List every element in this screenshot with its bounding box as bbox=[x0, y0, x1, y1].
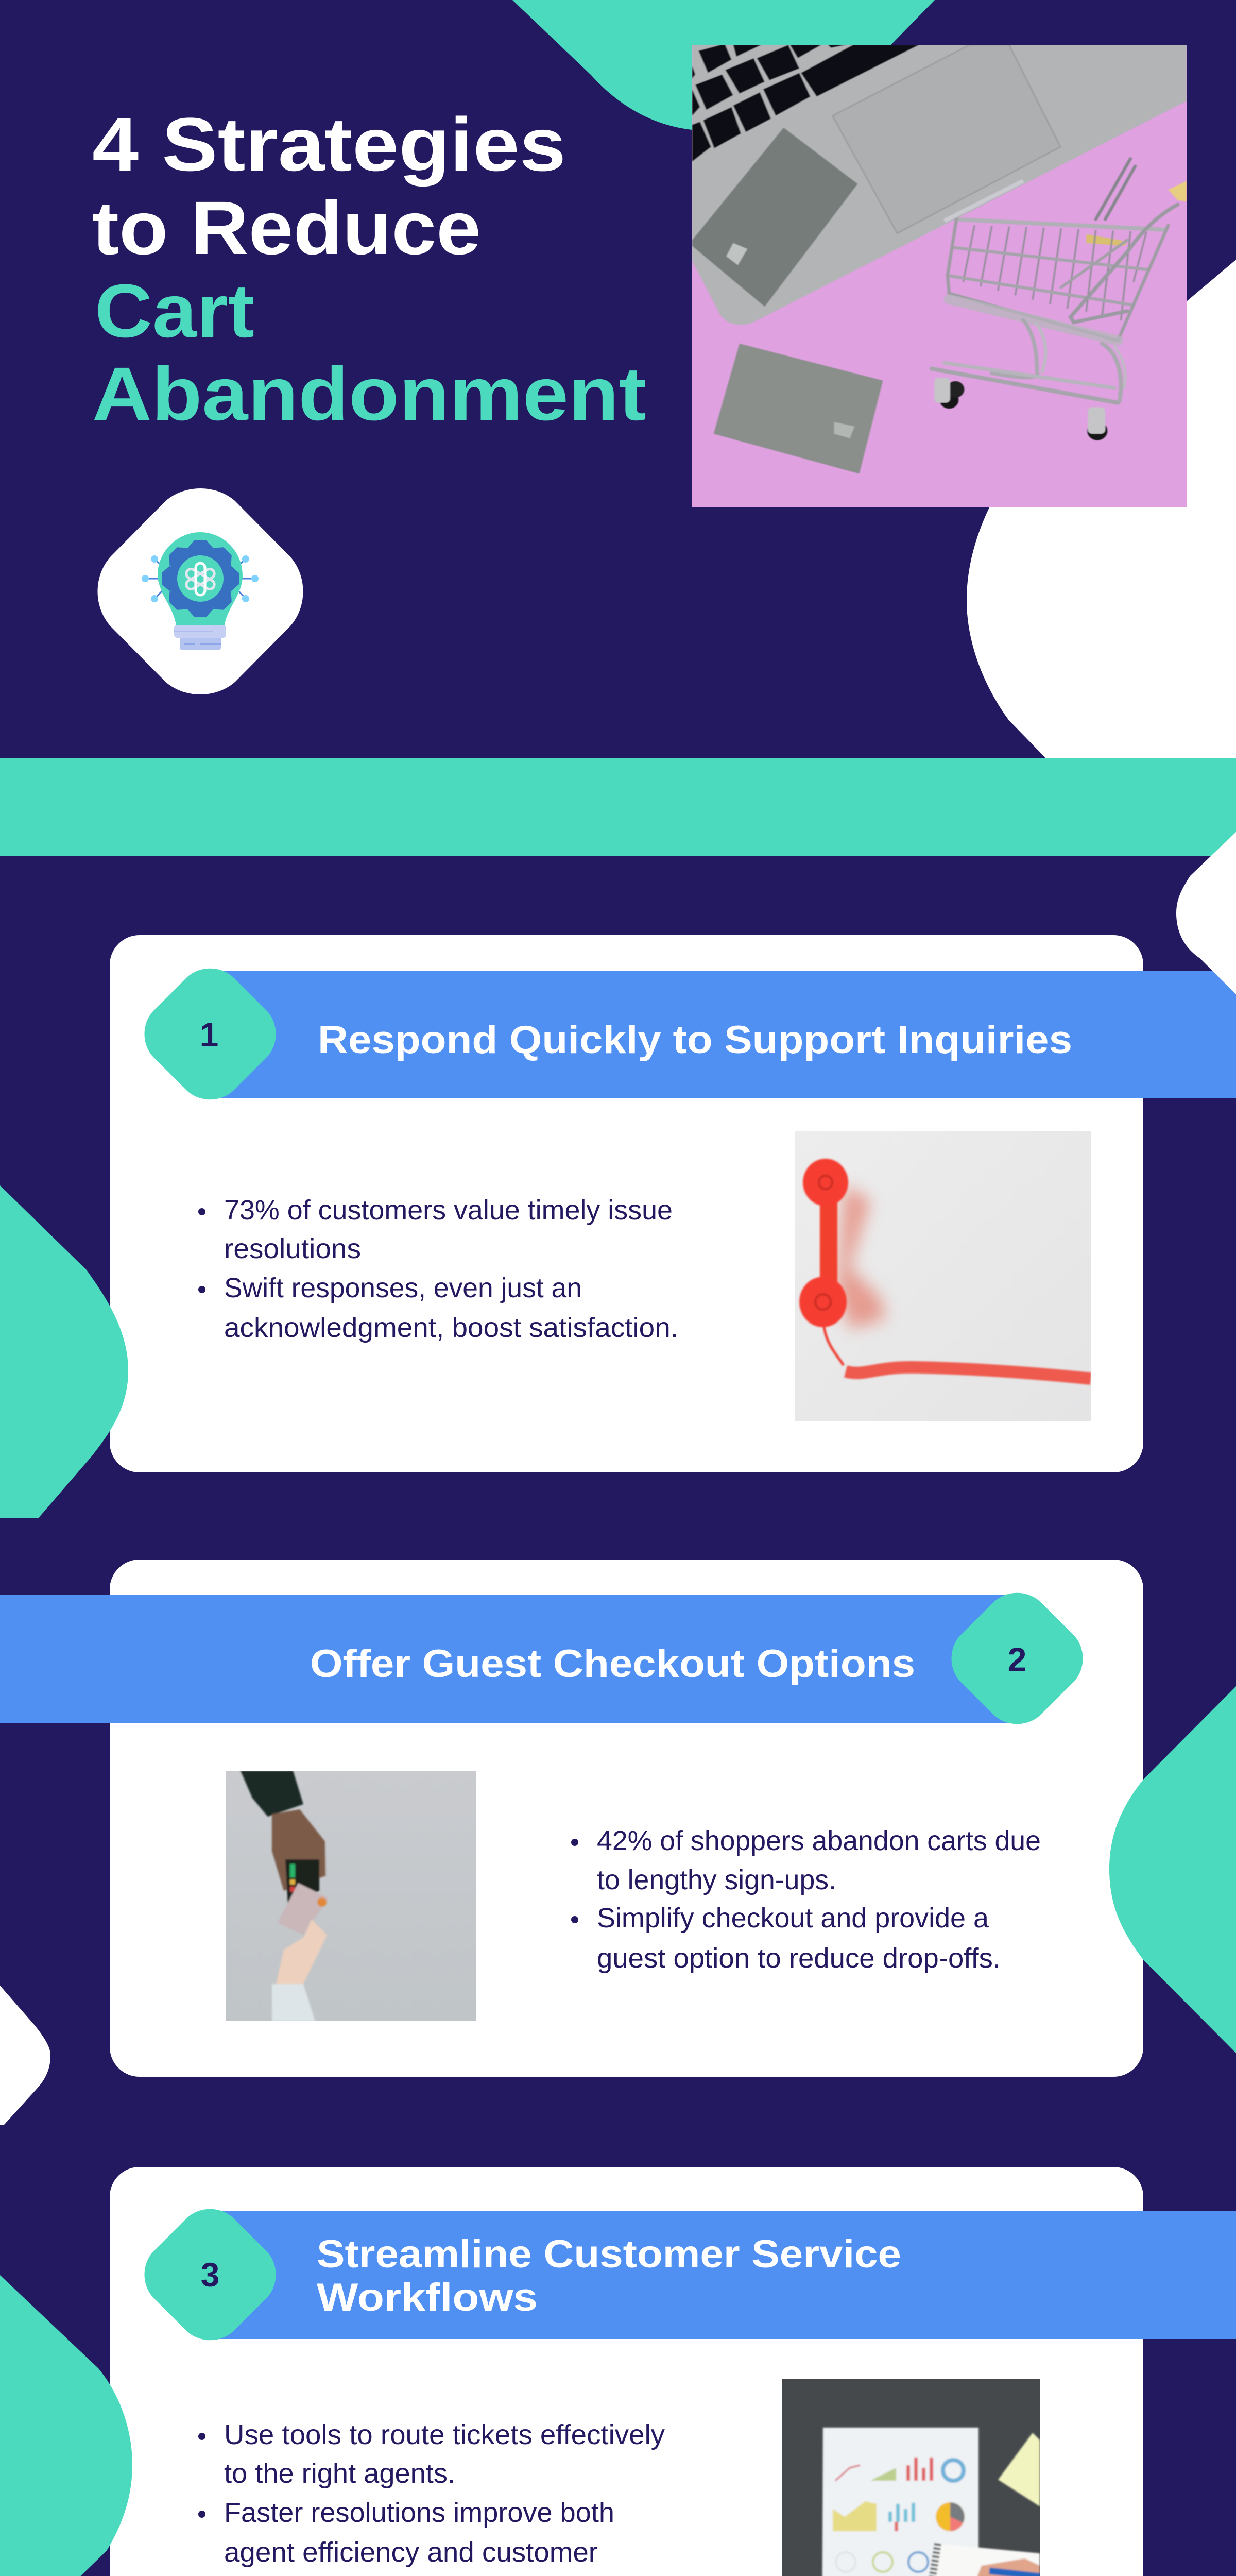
decorative shape: right white blob under band bbox=[1176, 832, 1236, 994]
step 1 bullets bbox=[198, 1195, 678, 1343]
step 2 bullets: to lengthy sign-ups. bbox=[597, 1865, 836, 1895]
step 1 number badge bbox=[144, 969, 276, 1099]
step 1 bullets: 73% of customers value timely issue bbox=[224, 1195, 673, 1226]
decorative shape: top right white blob bbox=[967, 260, 1236, 758]
decorative shape: left teal blob 1 bbox=[0, 1185, 128, 1518]
panel: step 3 bbox=[110, 2167, 1236, 2576]
step 3 ribbon bbox=[210, 2211, 1236, 2339]
header title: to Reduce bbox=[92, 186, 481, 270]
step 2 ribbon bbox=[0, 1595, 1017, 1723]
header title bbox=[92, 103, 646, 436]
decorative shape: left white blob 2 bbox=[0, 1986, 50, 2125]
panel: step 1 bbox=[110, 935, 1236, 1472]
teal band bbox=[0, 758, 1236, 856]
step 3 bullets: agent efficiency and customer bbox=[224, 2537, 598, 2568]
step 2 number badge: 2 bbox=[1008, 1640, 1026, 1679]
header title: Abandonment bbox=[92, 352, 646, 436]
step 2 bullets bbox=[571, 1825, 1041, 1974]
step 1 bullets: resolutions bbox=[224, 1233, 361, 1264]
step 2 heading: Offer Guest Checkout Options bbox=[310, 1642, 915, 1686]
step 2 number badge bbox=[952, 1593, 1083, 1724]
step 3 number badge: 3 bbox=[201, 2256, 219, 2294]
step 3 bullets: Use tools to route tickets effectively bbox=[224, 2419, 665, 2450]
step 3 number badge bbox=[144, 2209, 276, 2340]
step 3 heading bbox=[317, 2232, 901, 2319]
step 1 number badge: 1 bbox=[200, 1015, 218, 1054]
step 1 heading: Respond Quickly to Support Inquiries bbox=[318, 1018, 1072, 1062]
photo: red telephone handset bbox=[795, 1131, 1091, 1421]
decorative shape: top teal blob bbox=[512, 0, 935, 130]
step 3 heading: Streamline Customer Service bbox=[317, 2232, 901, 2276]
step 1 bullets: Swift responses, even just an bbox=[224, 1273, 582, 1303]
icon: lightbulb with gear in white diamond bbox=[98, 488, 303, 694]
step 3 heading: Workflows bbox=[317, 2276, 538, 2319]
step 3 bullets: to the right agents. bbox=[224, 2458, 455, 2489]
photo: hands with card and terminal bbox=[226, 1771, 476, 2021]
step 3 bullets bbox=[198, 2419, 665, 2576]
decorative shape: right teal blob 2 bbox=[1109, 1686, 1236, 2053]
step 3 bullets: Faster resolutions improve both bbox=[224, 2497, 614, 2528]
step 2 bullets: Simplify checkout and provide a bbox=[597, 1903, 989, 1934]
panel: step 2 bbox=[0, 1560, 1143, 2077]
photo: printed charts and hand writing bbox=[782, 2379, 1040, 2576]
decorative shape: left teal blob 3 bbox=[0, 2275, 132, 2576]
header title: Cart bbox=[95, 269, 254, 353]
header title: 4 Strategies bbox=[92, 103, 566, 187]
photo: laptop, cards and shopping cart bbox=[692, 45, 1187, 507]
step 2 bullets: guest option to reduce drop-offs. bbox=[597, 1943, 1001, 1974]
step 2 bullets: 42% of shoppers abandon carts due bbox=[597, 1825, 1041, 1856]
step 1 bullets: acknowledgment, boost satisfaction. bbox=[224, 1312, 678, 1343]
step 1 ribbon bbox=[210, 971, 1236, 1098]
